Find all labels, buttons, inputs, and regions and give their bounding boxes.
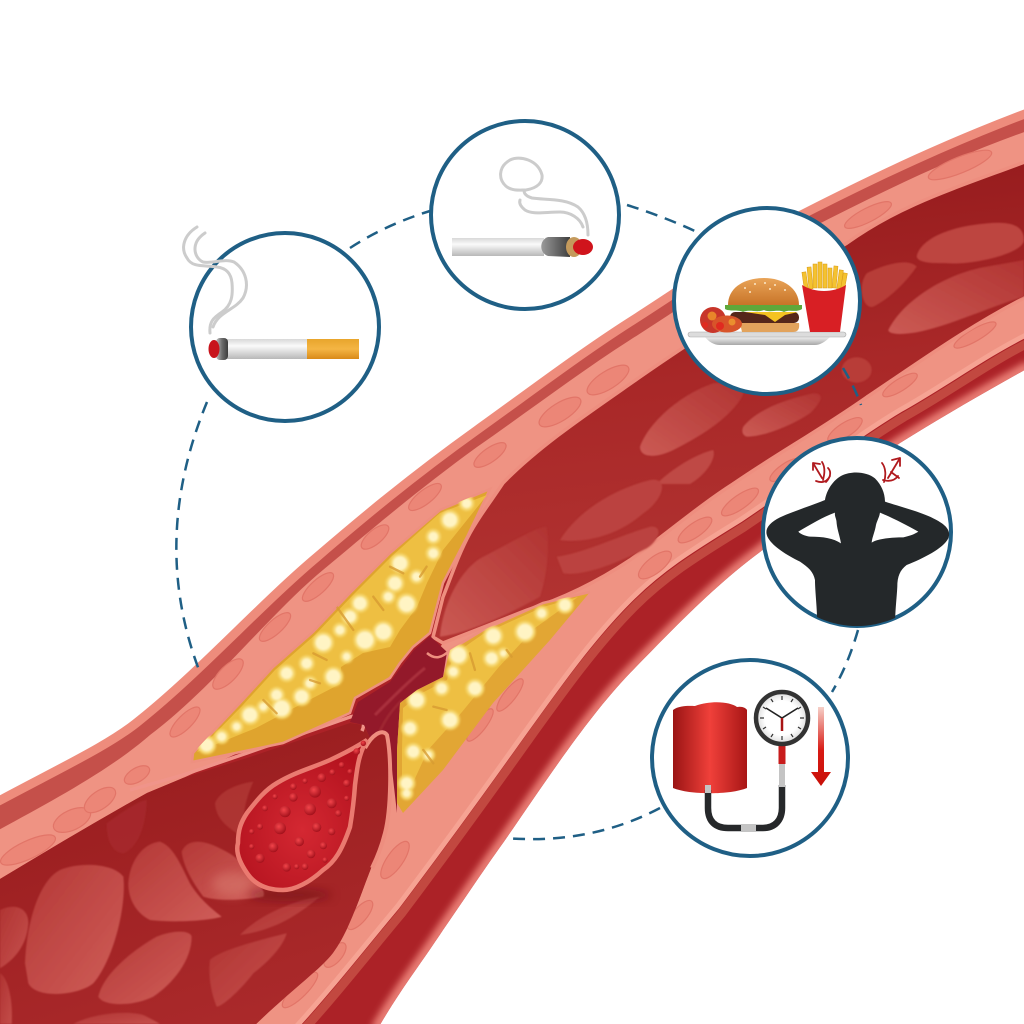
person silhouette — [766, 473, 949, 630]
plaque lower — [397, 592, 590, 813]
upper flap intima line — [130, 716, 364, 790]
stress marks — [813, 458, 900, 482]
tube — [708, 785, 782, 828]
nuggets — [700, 307, 742, 333]
cuff — [673, 702, 747, 793]
burnt ash — [216, 338, 228, 360]
icon circle: cigarette with filter — [184, 227, 379, 421]
smoke — [501, 158, 588, 235]
upper wall muscle band — [0, 112, 1024, 832]
plaque lower bright core — [402, 597, 578, 795]
lower flap fold — [365, 732, 390, 868]
upper wall — [0, 112, 1024, 882]
lower wall cells — [278, 318, 999, 1012]
outer edge glow — [377, 367, 1024, 1024]
gauge — [756, 692, 808, 744]
plaque lower fat globules — [401, 599, 571, 797]
burnt section — [541, 237, 570, 257]
glow below thrombus — [212, 872, 252, 896]
left lumen — [0, 723, 390, 1024]
stenosis channel — [350, 636, 447, 813]
ember — [566, 237, 593, 257]
thrombus teardrop — [237, 740, 367, 890]
icon circle: fast food — [674, 208, 860, 394]
icon circle: stressed person — [763, 438, 951, 630]
plaque upper — [192, 489, 490, 762]
cigarette body — [452, 238, 544, 256]
gauge stem — [778, 746, 786, 764]
dashed connector ring — [176, 205, 861, 839]
left lumen tissue blobs — [0, 782, 320, 1024]
right lumen tissue blobs — [440, 223, 1024, 637]
plaque lower top intima — [427, 592, 590, 657]
down arrow — [811, 707, 831, 786]
right lumen — [433, 160, 1024, 643]
cigarette body — [227, 339, 308, 359]
ember — [208, 340, 220, 358]
cigarette filter — [307, 339, 359, 359]
plaque lower wrinkles — [423, 650, 512, 763]
lower wall — [250, 295, 1024, 1024]
thrombus cell dots — [249, 741, 366, 872]
fries — [802, 262, 847, 332]
teardrop shadow — [248, 889, 332, 901]
icon circle: burnt cigarette — [431, 121, 619, 309]
tube connectors — [705, 763, 785, 832]
plaque upper bright core — [197, 495, 487, 752]
plate — [688, 332, 846, 345]
smoke — [184, 227, 246, 333]
plaque upper wrinkles — [263, 567, 427, 713]
burger — [725, 278, 802, 332]
icon circle: blood pressure monitor — [652, 660, 848, 856]
upper wall cells — [0, 145, 995, 871]
sesame seeds — [744, 282, 786, 293]
plaque upper fat globules — [200, 498, 472, 752]
